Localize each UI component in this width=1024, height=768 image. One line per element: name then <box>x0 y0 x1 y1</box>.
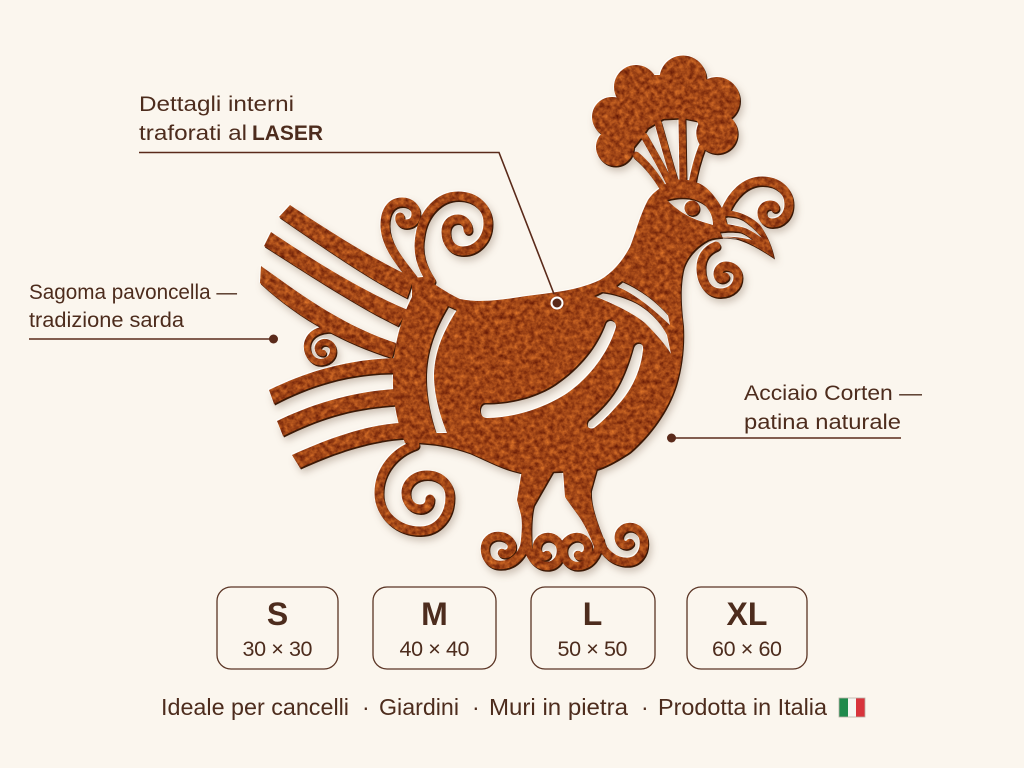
size XL card: 60 × 60 <box>712 637 782 661</box>
size S card: S <box>267 596 288 632</box>
leader line <box>29 338 273 340</box>
callout text: Sagoma pavoncella — <box>29 280 237 304</box>
crest flower <box>592 56 740 166</box>
callout text: patina naturale <box>744 410 901 434</box>
callout text: LASER <box>252 121 323 145</box>
callout: silhouette <box>29 280 278 344</box>
head spiral upper <box>725 181 789 223</box>
icon: Italian flag <box>839 698 865 717</box>
size S card <box>217 587 338 669</box>
footer uses: Prodotta in Italia <box>658 694 827 720</box>
tail spiral small <box>385 202 416 280</box>
eye pupil <box>684 200 700 216</box>
size L card: 50 × 50 <box>558 637 628 661</box>
size XL card <box>687 587 807 669</box>
size M card <box>373 587 496 669</box>
footer uses: · <box>362 694 370 720</box>
footer uses: · <box>641 694 649 720</box>
callout: corten <box>667 381 923 442</box>
illustration: Corten steel peacock silhouette <box>260 56 789 566</box>
leader line <box>139 152 554 294</box>
tail spiral large <box>419 196 488 281</box>
callout text: tradizione sarda <box>29 308 184 332</box>
size XL card: XL <box>727 596 767 632</box>
footer uses: · <box>472 694 480 720</box>
marker dot <box>269 334 278 344</box>
marker dot <box>667 434 676 442</box>
footer uses: Giardini <box>379 694 459 720</box>
feather spiral <box>307 329 336 362</box>
callout: laser details <box>139 92 562 308</box>
callout text: traforati al <box>139 121 247 145</box>
scroll spirals <box>307 181 789 566</box>
body with neck, head, beak and laser-cut slots <box>393 179 774 473</box>
marker dot <box>552 298 562 308</box>
head spiral lower <box>701 246 738 293</box>
size S card: 30 × 30 <box>242 637 313 661</box>
size L card: L <box>583 596 602 632</box>
leader line <box>672 437 901 439</box>
crest stems <box>636 119 702 188</box>
legs <box>517 465 606 548</box>
tail feathers <box>260 205 414 468</box>
footer uses: Ideale per cancelli <box>161 694 349 720</box>
size M card: 40 × 40 <box>400 637 470 661</box>
callout text: Acciaio Corten — <box>744 381 923 405</box>
footer uses: Muri in pietra <box>489 694 628 720</box>
size M card: M <box>421 596 448 632</box>
foot curls <box>485 527 644 566</box>
size L card <box>531 587 655 669</box>
lower tail spiral <box>379 445 450 531</box>
callout text: Dettagli interni <box>139 92 294 116</box>
